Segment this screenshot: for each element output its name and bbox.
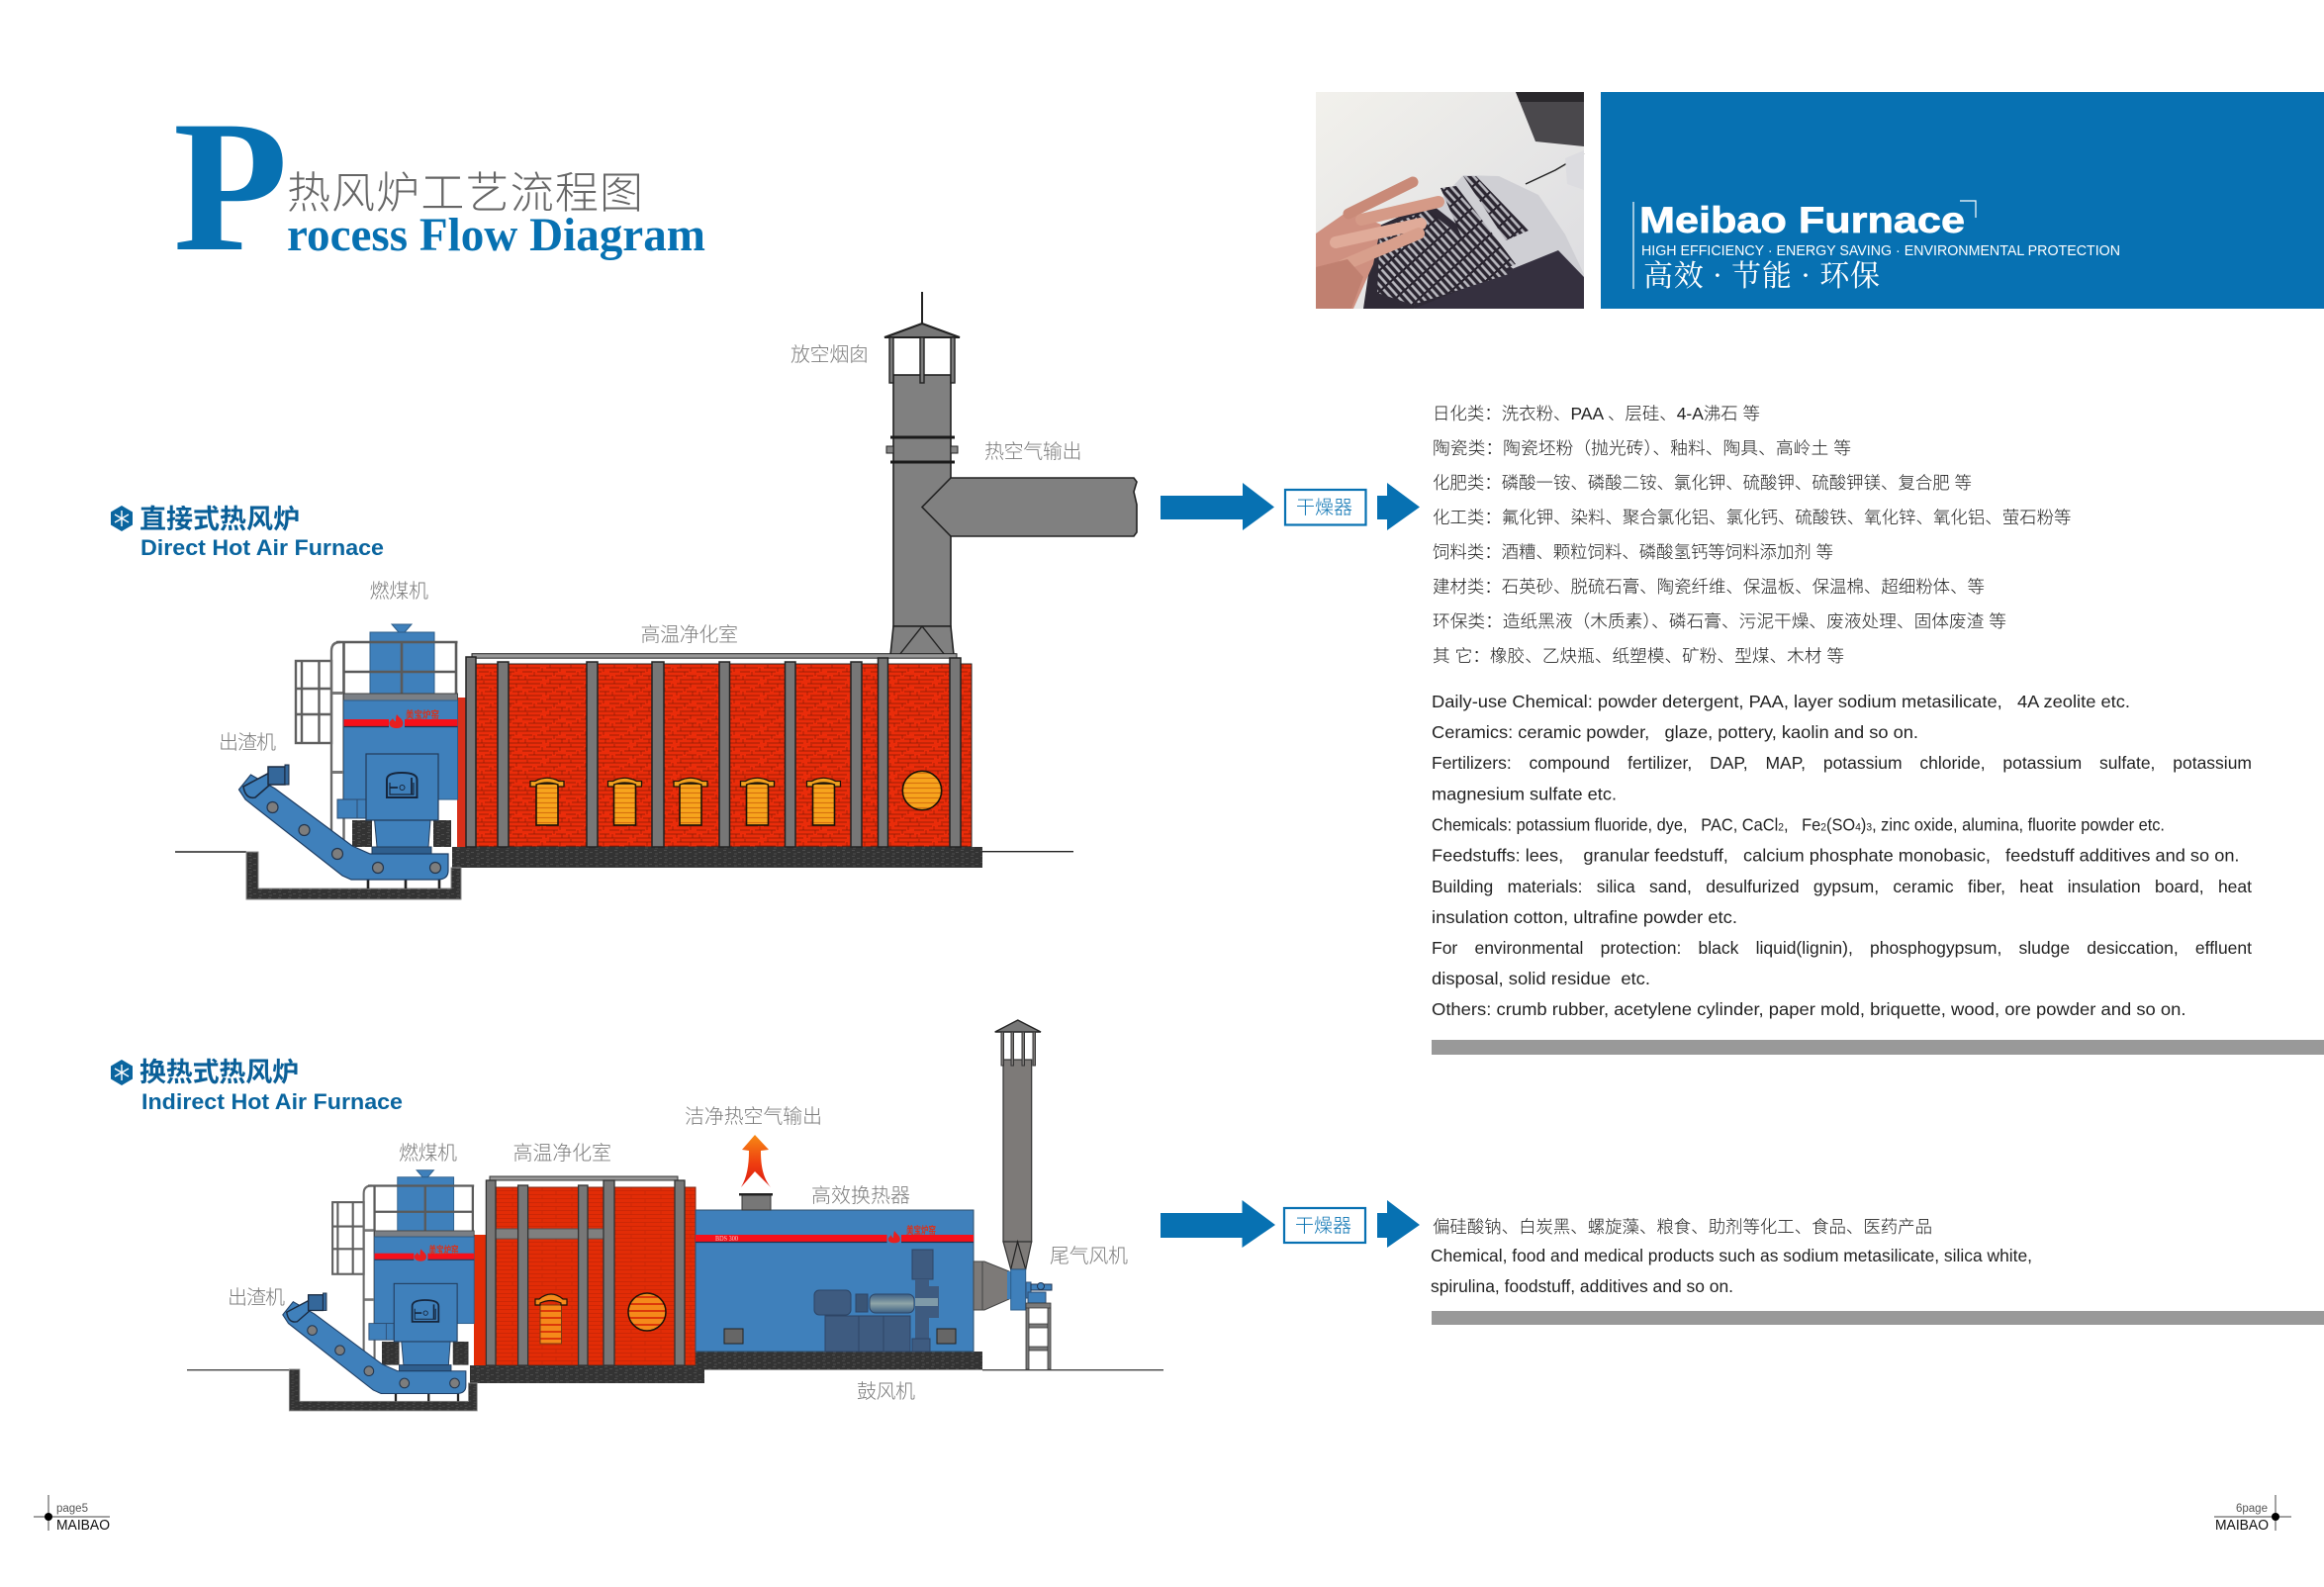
- label: clean hot air output: 洁净热空气输出: [685, 1105, 822, 1128]
- English application list: For environmental protection: black liquid(lignin), phosphogypsum, sludge desiccation, effluent: [1432, 938, 2252, 958]
- heading: direct hot air furnace: [111, 505, 384, 560]
- English application list: Fertilizers: compound fertilizer, DAP, MAP, potassium chloride, potassium sulfate, potassium: [1432, 753, 2252, 773]
- dryer box: 干燥器: [1295, 1215, 1351, 1237]
- icon: hexagon bullet: [111, 506, 133, 531]
- round port: [902, 771, 942, 810]
- Chinese application list: 日化类：洗衣粉、PAA 、层硅、4-A沸石 等: [1433, 404, 1760, 423]
- label: heat exchanger: 高效换热器: [811, 1184, 910, 1207]
- label: purification chamber: 高温净化室: [512, 1142, 611, 1165]
- Chinese application list: 建材类：石英砂、脱硫石膏、陶瓷纤维、保温板、保温棉、超细粉体、等: [1433, 577, 1985, 597]
- text panel: direct furnace applications: [1432, 404, 2252, 1019]
- exhaust chimney and tail fan: [974, 1020, 1052, 1369]
- labels: [219, 343, 1082, 754]
- label: coal burner: 燃煤机: [399, 1142, 457, 1165]
- text panel: indirect furnace applications: 偏硅酸钠、白炭黑、螺旋藻、粮食、助剂等化工、食品、医药产品: [1433, 1217, 1932, 1237]
- title: large initial P: P: [173, 83, 288, 291]
- text panel: indirect furnace applications: [1431, 1217, 2032, 1296]
- footer: right page mark: MAIBAO: [2215, 1517, 2269, 1534]
- chimney with hot air outlet: [884, 292, 1137, 655]
- Chinese application list: 其 它：橡胶、乙炔瓶、纸塑模、矿粉、型煤、木材 等: [1433, 646, 1844, 666]
- blower inside exchanger: [814, 1250, 939, 1352]
- Chinese application list: 陶瓷类：陶瓷坯粉（抛光砖）、釉料、陶具、高岭土 等: [1433, 438, 1851, 458]
- title: English heading: rocess Flow Diagram: [287, 209, 705, 261]
- English application list: Ceramics: ceramic powder, glaze, pottery, kaolin and so on.: [1432, 722, 1918, 742]
- purification chamber: [470, 1176, 704, 1383]
- heat exchanger: 美宝炉窑: [906, 1224, 936, 1237]
- heat exchanger: [696, 1193, 982, 1369]
- heading text: English: Direct Hot Air Furnace: [140, 535, 384, 560]
- English application list: magnesium sulfate etc.: [1432, 784, 1617, 803]
- English application list: Others: crumb rubber, acetylene cylinder, paper mold, briquette, wood, ore powder and so on.: [1432, 999, 2186, 1019]
- label: slag remover: 出渣机: [219, 731, 276, 754]
- label: blower: 鼓风机: [857, 1380, 915, 1403]
- observation door: [535, 1294, 567, 1344]
- title: Chinese heading: 热风炉工艺流程图: [287, 169, 643, 218]
- observation doors: [530, 778, 841, 825]
- English application list: Chemicals: potassium fluoride, dye, PAC, CaCl2, Fe2(SO4)3, zinc oxide, alumina, fluorite powder etc.: [1432, 815, 2165, 835]
- English application list: Daily-use Chemical: powder detergent, PAA, layer sodium metasilicate, 4A zeolite etc.: [1432, 692, 2130, 711]
- label: slag remover: 出渣机: [228, 1286, 285, 1309]
- Chinese application list: 化工类：氟化钾、染料、聚合氯化铝、氯化钙、硫酸铁、氧化锌、氧化铝、萤石粉等: [1433, 508, 2072, 527]
- banner: Chinese tagline: 高效 · 节能 · 环保: [1643, 251, 1880, 295]
- diagram: direct hot air furnace: [175, 292, 1137, 899]
- banner: brand name: Meibao Furnace: [1639, 200, 1965, 240]
- label: hot air output: 热空气输出: [984, 440, 1082, 463]
- footer: left page mark: [34, 1495, 110, 1534]
- round port: [628, 1293, 666, 1331]
- English application list: disposal, solid residue etc.: [1432, 969, 1650, 988]
- label: purification chamber: 高温净化室: [641, 623, 738, 646]
- banner: English tagline: HIGH EFFICIENCY · ENERGY SAVING · ENVIRONMENTAL PROTECTION: [1641, 242, 2120, 259]
- heat exchanger: BDS 300: [715, 1234, 738, 1243]
- coal burner and slag conveyor: 美宝炉窑: [429, 1244, 459, 1257]
- label: coal burner: 燃煤机: [370, 580, 428, 603]
- footer: left page mark: MAIBAO: [56, 1517, 110, 1534]
- diagram: indirect hot air furnace: [187, 1020, 1163, 1411]
- flow arrow to dryer, direct furnace: [1161, 483, 1420, 530]
- English application list: insulation cotton, ultrafine powder etc.: [1432, 907, 1737, 927]
- title: [173, 83, 705, 291]
- coal burner and slag conveyor: 美宝炉窑: [406, 708, 439, 721]
- labels: [228, 1105, 1128, 1403]
- English application list: [1432, 692, 2252, 1019]
- footer: left page mark: page5: [56, 1503, 88, 1515]
- banner: Meibao Furnace: [1601, 92, 2324, 309]
- English application list: Building materials: silica sand, desulfurized gypsum, ceramic fiber, heat insulation board, heat: [1432, 877, 2252, 896]
- coal burner and slag conveyor: [283, 1170, 477, 1411]
- footer: right page mark: [2214, 1495, 2291, 1534]
- photo: hands typing on keyboard: [1316, 92, 1584, 309]
- label: tail gas fan: 尾气风机: [1050, 1245, 1128, 1267]
- footer: right page mark: 6page: [2236, 1503, 2268, 1515]
- coal burner and slag conveyor: [239, 624, 461, 899]
- text panel: indirect furnace applications: spirulina, foodstuff, additives and so on.: [1431, 1276, 1733, 1296]
- heading: indirect hot air furnace: [111, 1058, 403, 1114]
- heading text: Chinese: 换热式热风炉: [139, 1058, 299, 1087]
- flow arrow to dryer, indirect furnace: [1161, 1200, 1420, 1248]
- dryer box: 干燥器: [1296, 497, 1352, 518]
- Chinese application list: [1433, 404, 2072, 666]
- text panel: indirect furnace applications: Chemical, food and medical products such as sodium metasilicate, silica white,: [1431, 1246, 2032, 1265]
- heading text: Chinese: 直接式热风炉: [139, 505, 300, 534]
- Chinese application list: 环保类：造纸黑液（木质素）、磷石膏、污泥干燥、废液处理、固体废渣 等: [1433, 611, 2006, 631]
- dryer box: [1285, 490, 1365, 524]
- dryer box: [1284, 1208, 1365, 1243]
- icon: hexagon bullet: [111, 1060, 133, 1085]
- heading text: English: Indirect Hot Air Furnace: [141, 1089, 403, 1114]
- Chinese application list: 化肥类：磷酸一铵、磷酸二铵、氯化钾、硫酸钾、硫酸钾镁、复合肥 等: [1433, 473, 1972, 493]
- English application list: Feedstuffs: lees, granular feedstuff, calcium phosphate monobasic, feedstuff additives and so on.: [1432, 846, 2240, 866]
- icon: red hot air arrow: [741, 1135, 771, 1187]
- label: vent chimney: 放空烟囱: [790, 343, 869, 366]
- clean air stack: [739, 1193, 773, 1210]
- Chinese application list: 饲料类：酒糟、颗粒饲料、磷酸氢钙等饲料添加剂 等: [1433, 542, 1833, 562]
- high temperature purification chamber: [452, 654, 982, 868]
